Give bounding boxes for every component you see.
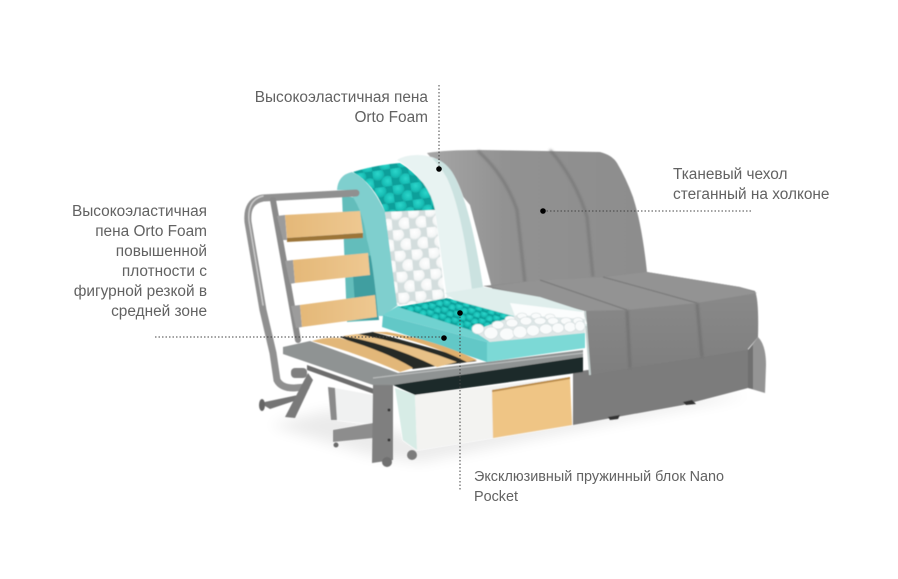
label: fabric cover: Тканевый чехол [673, 166, 788, 183]
white bumped foam middle [385, 210, 445, 305]
label: left foam: фигурной резкой в [74, 283, 207, 300]
dark underside [393, 357, 583, 395]
wood panel [492, 377, 572, 438]
dotted leader: right [540, 208, 751, 214]
seat teal bumps [398, 298, 517, 331]
label: top foam [255, 89, 428, 126]
dotted leader: top [436, 85, 442, 172]
label: fabric cover [673, 166, 829, 203]
label: left foam [72, 203, 207, 320]
folding mechanism and legs [259, 365, 393, 467]
outer teal foam shell [337, 172, 398, 316]
label: spring block: Эксклюзивный пружинный блок Nano [474, 469, 724, 485]
label: left foam: плотности с [122, 263, 207, 280]
dotted leader: bottom [457, 310, 463, 490]
back frame [248, 193, 356, 388]
label: fabric cover: стеганный на холконе [673, 186, 829, 203]
label: spring block: Pocket [474, 489, 518, 505]
label: left foam: средней зоне [111, 303, 207, 320]
back side of teal foam [342, 195, 379, 322]
storage box [395, 377, 570, 460]
seat white bumps [472, 313, 585, 342]
dotted leader: left [155, 335, 447, 341]
sofa backrest [427, 150, 647, 292]
sofa seat [483, 272, 758, 375]
label: left foam: Высокоэластичная [72, 203, 207, 220]
seat white foam layer [445, 287, 587, 326]
wooden back slats [277, 211, 377, 328]
backrest white foam layer [397, 155, 483, 298]
label: top foam: Orto Foam [354, 109, 428, 126]
seat frame rail [283, 341, 583, 385]
label: left foam: повышенной [116, 243, 207, 260]
sofa illustration [248, 150, 766, 467]
floor shadow [270, 395, 750, 462]
label: top foam: Высокоэластичная пена [255, 89, 428, 106]
label: spring block [474, 469, 724, 505]
curved wooden seat slats [312, 332, 477, 372]
teal bumped foam top [353, 163, 435, 212]
sofa base [573, 337, 766, 425]
seat foam base block [382, 306, 585, 362]
label: left foam: пена Orto Foam [95, 223, 207, 240]
